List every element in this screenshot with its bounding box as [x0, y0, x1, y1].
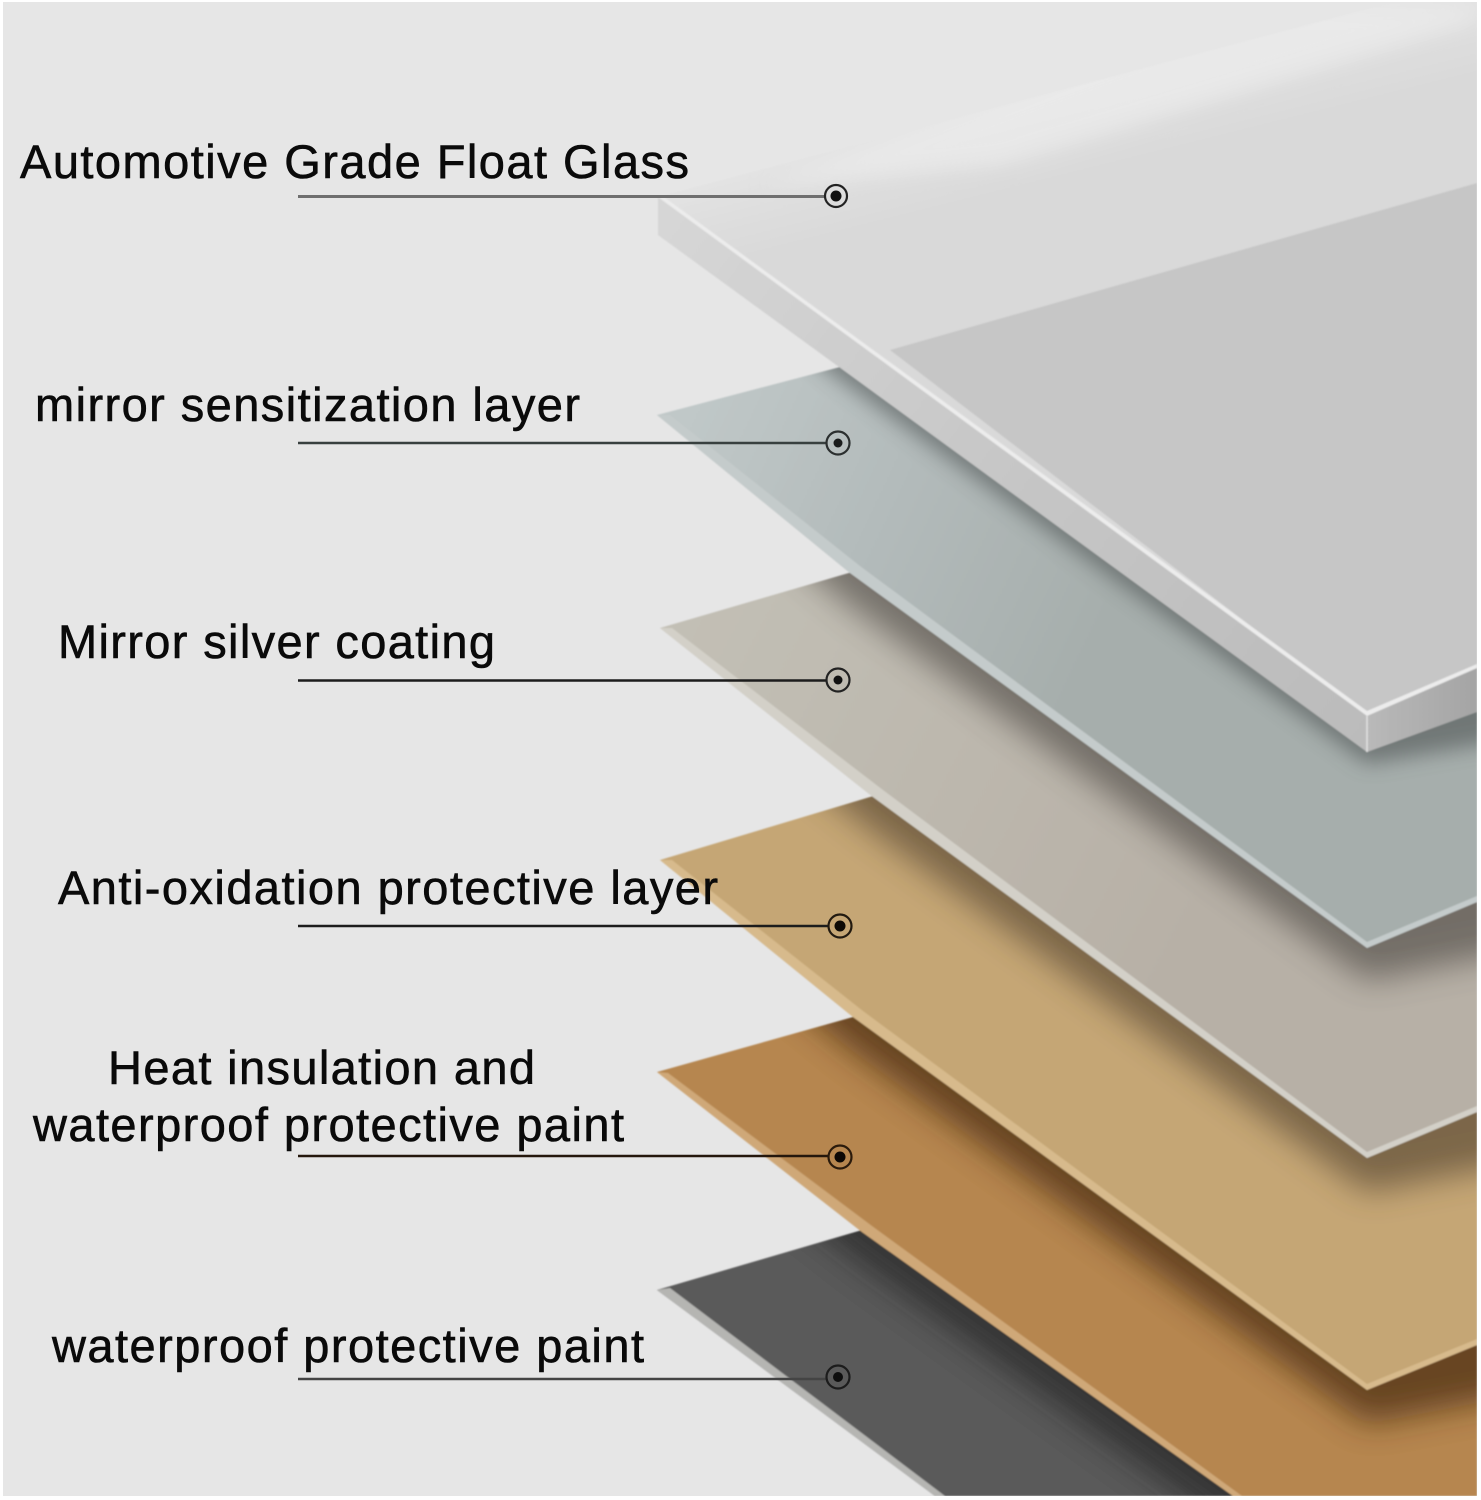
glass front edge: [658, 197, 1367, 752]
layered material stack: [657, 0, 1481, 1500]
marker: [826, 432, 850, 454]
label: Anti-oxidation protective layer: [58, 861, 718, 914]
label: waterproof protective paint: [51, 1319, 644, 1372]
layer 2: blue-grey sensitization layer: [657, 366, 1477, 949]
label line 2: waterproof protective paint: [32, 1098, 624, 1151]
leader line: [298, 925, 829, 927]
label line 1: Heat insulation and: [108, 1041, 535, 1094]
callout: Anti-oxidation protective layer: [58, 861, 852, 938]
leader line: [298, 679, 827, 682]
layer 1: automotive grade float glass: [658, 0, 1477, 752]
glass side edge: [1367, 668, 1477, 752]
label: Mirror silver coating: [58, 615, 495, 668]
leader line: [298, 1155, 829, 1157]
layer 6: dark grey waterproof paint: [656, 1230, 1233, 1496]
marker: [828, 1146, 852, 1168]
callout: Automotive Grade Float Glass: [20, 135, 847, 207]
label: Automotive Grade Float Glass: [20, 135, 689, 188]
layer 4: tan anti-oxidation layer: [660, 796, 1477, 1391]
callout: waterproof protective paint: [51, 1319, 850, 1388]
leader line: [298, 195, 825, 198]
label: mirror sensitization layer: [35, 378, 580, 431]
marker: [826, 1366, 850, 1388]
callout: Mirror silver coating: [58, 615, 850, 692]
leader line: [298, 442, 827, 444]
glass top surface: [707, 30, 1477, 622]
marker: [826, 668, 850, 692]
layer 5: copper heat insulation paint: [656, 1016, 1477, 1496]
callout: Heat insulation and waterproof protective paint: [32, 1041, 852, 1168]
marker: [825, 185, 847, 207]
marker: [828, 914, 852, 938]
callout: mirror sensitization layer: [35, 378, 850, 454]
layer 3: beige-grey silver coating: [660, 572, 1477, 1159]
leader line: [298, 1378, 827, 1380]
